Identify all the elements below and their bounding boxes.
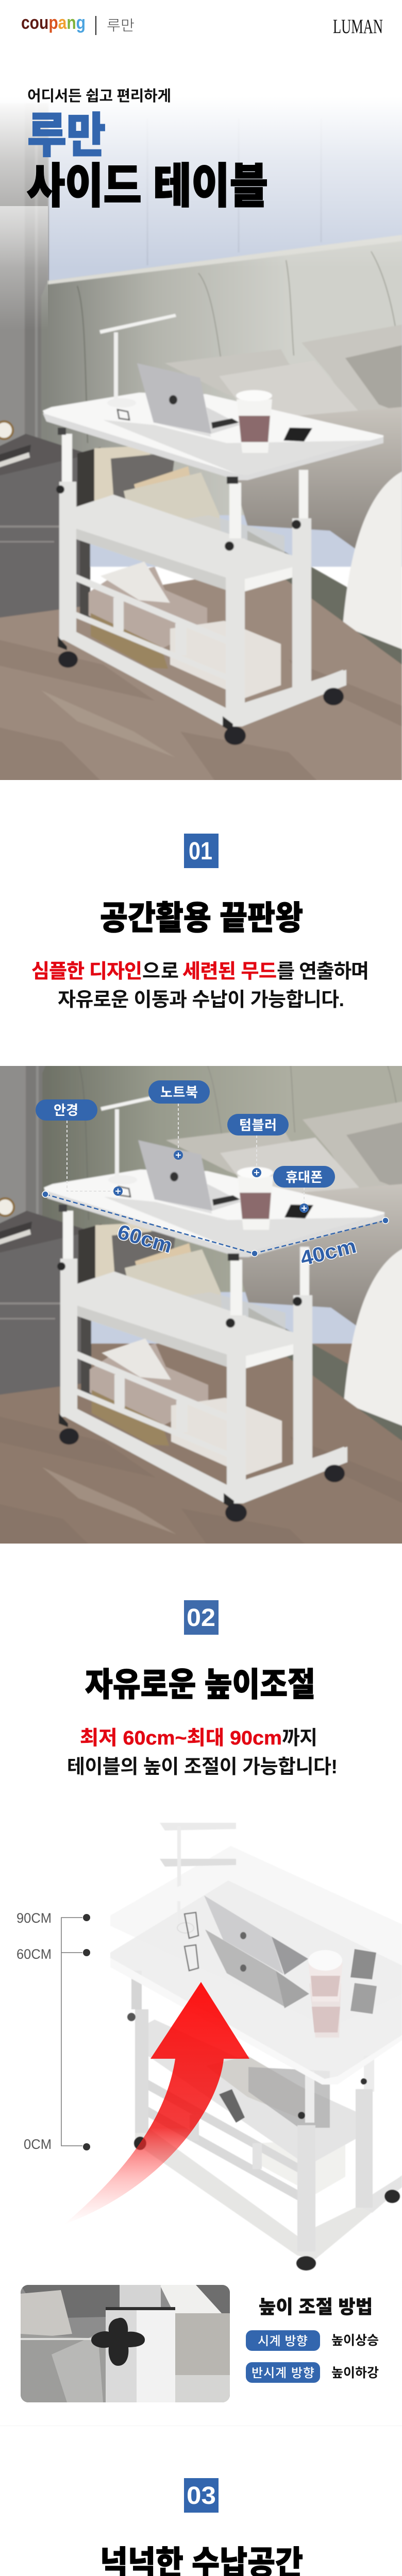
callout: 휴대폰: 휴대폰 [286, 1170, 323, 1185]
height scale: 90CM [16, 1910, 52, 1926]
label 40cm: 40cm [298, 1234, 359, 1270]
height adjustment diagram [16, 1823, 402, 2270]
callout: 노트북 [148, 1080, 210, 1104]
description [67, 1727, 338, 1778]
badge 03 [184, 2478, 219, 2513]
heading: 자유로운 높이조절 [85, 1666, 315, 1703]
callout: 텀블러: 텀블러 [239, 1117, 277, 1133]
label 60cm: 60cm [115, 1221, 175, 1258]
label: lower: 높이하강 [331, 2366, 379, 2380]
divider and brand label [95, 16, 135, 35]
callout: 안경: 안경 [54, 1103, 78, 1118]
description [31, 961, 369, 1011]
hero title: 사이드 테이블 [27, 160, 268, 213]
dimension lines [45, 1194, 386, 1253]
section 02 intro [67, 1600, 338, 1778]
height scale: 60CM [16, 1946, 52, 1962]
badge 02: 02 [187, 1604, 215, 1632]
badge 01 [184, 834, 219, 868]
hero title: 루만 [27, 110, 106, 162]
label: raise: 높이상승 [331, 2333, 379, 2348]
section 03 intro [44, 2478, 359, 2576]
description: 최저 60cm~최대 90cm [80, 1727, 282, 1749]
section 01 photo with callouts [0, 1066, 402, 1544]
ghosted table [110, 1823, 402, 2270]
height scale: 0CM [24, 2137, 52, 2152]
description: 심플한 디자인 [31, 961, 142, 982]
height scale [16, 1910, 90, 2152]
description: 세련된 무드 [182, 961, 277, 982]
description: 를 연출하며 [277, 961, 369, 982]
badge 01: 01 [189, 838, 212, 865]
hero panel [0, 0, 402, 783]
pill: counter-clockwise: 반시계 방향 [252, 2366, 314, 2380]
description: 으로 [142, 961, 179, 982]
hero title [27, 110, 268, 213]
dimension dots [42, 1191, 389, 1257]
description: 테이블의 높이 조절이 가능합니다! [67, 1756, 338, 1778]
description: 까지 [282, 1727, 317, 1749]
pill: counter-clockwise [246, 2362, 320, 2383]
heading: 공간활용 끝판왕 [100, 900, 303, 937]
pill: clockwise: 시계 방향 [258, 2334, 308, 2348]
photo [0, 1066, 402, 1544]
hero photo: bed and side table [0, 105, 402, 780]
plus markers [113, 1150, 309, 1213]
legend title: 높이 조절 방법 [259, 2296, 373, 2317]
divider and brand label: 루만 [107, 18, 135, 33]
badge 03: 03 [187, 2482, 216, 2510]
hero eyebrow: 어디서든 쉽고 편리하게 [27, 88, 171, 105]
leader lines [67, 1104, 304, 1208]
description: 자유로운 이동과 수납이 가능합니다. [58, 989, 344, 1011]
section 01 intro [31, 834, 369, 1011]
pill: clockwise [246, 2330, 320, 2351]
red arrow [64, 1982, 249, 2225]
logo: coupang: coupang [21, 12, 86, 33]
callout: 노트북: 노트북 [160, 1084, 198, 1100]
callout: 안경 [36, 1099, 97, 1121]
height adjustment legend [246, 2296, 379, 2383]
callout: 휴대폰 [273, 1166, 335, 1188]
knob photo [21, 2285, 230, 2402]
badge 02 [184, 1600, 219, 1635]
callout: 텀블러 [227, 1114, 289, 1136]
